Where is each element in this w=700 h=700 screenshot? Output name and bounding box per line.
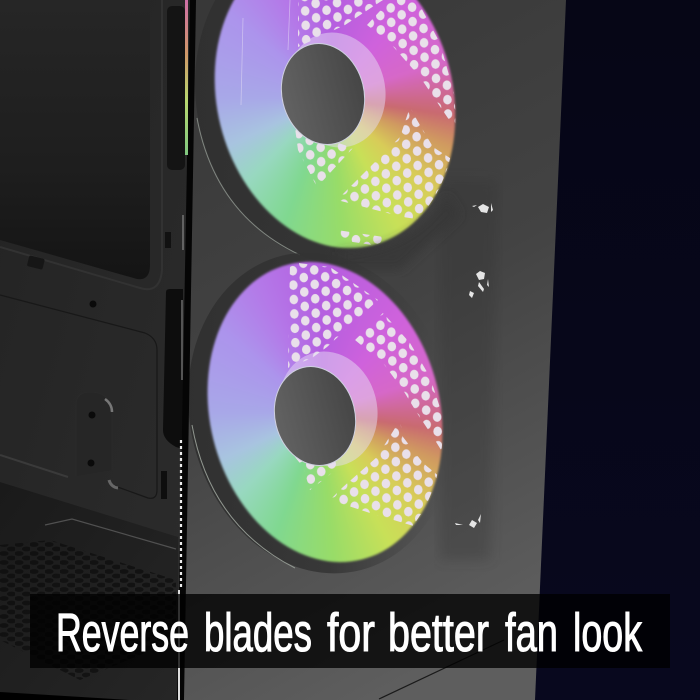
caption text: for (327, 603, 375, 663)
fan 1 (top) (195, 0, 457, 267)
caption text: look (573, 603, 643, 663)
glass side panel (180, 0, 566, 700)
fan 1 frame ring (195, 50, 344, 256)
caption bar (30, 594, 670, 668)
fan 1 perforations and hub (240, 0, 456, 267)
caption text: better (388, 603, 489, 663)
caption text: fan (505, 603, 558, 663)
case interior: left side wall (0, 0, 190, 700)
chassis behind glass, right side (440, 180, 497, 560)
fan 2 (bottom) (189, 253, 444, 574)
caption text: Reverse (56, 603, 189, 663)
glass left edge with LED reflections (177, 0, 196, 700)
fan 2 colour disc (177, 237, 473, 587)
fan 2 perforations and hub (274, 263, 442, 526)
fan 2 frame ring (189, 253, 400, 574)
glass diagonal reflection line (379, 640, 504, 699)
caption text: blades (204, 603, 312, 663)
fan 1 blade highlights (241, 0, 290, 105)
caption text (56, 603, 643, 663)
fan 1 colour disc (183, 0, 487, 274)
